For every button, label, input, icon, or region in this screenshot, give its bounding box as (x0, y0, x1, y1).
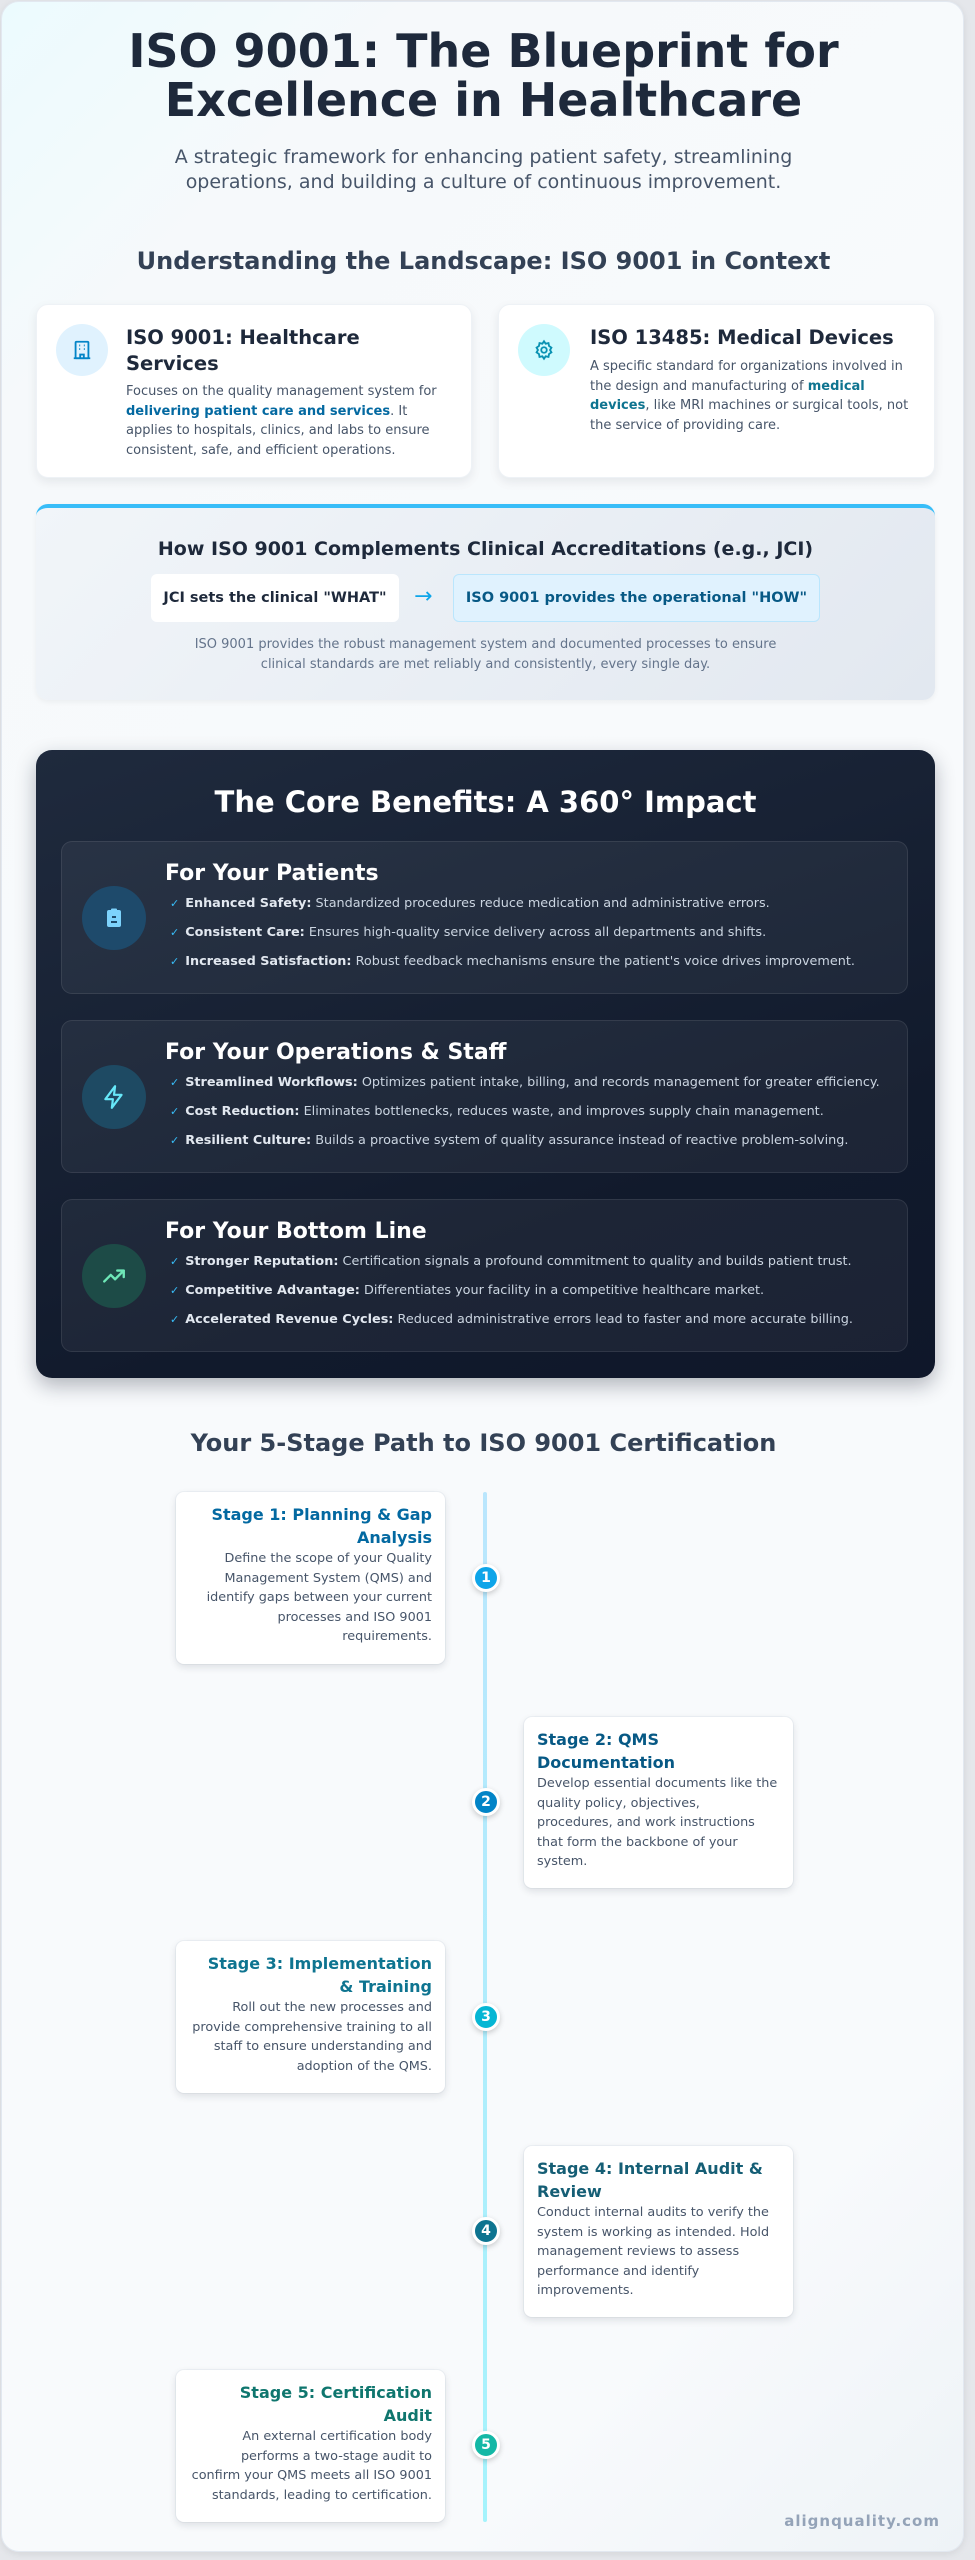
stage 5 card (176, 2370, 445, 2522)
heading: For Your Bottom Line (165, 1219, 427, 1244)
stage 3 card: staff to ensure understanding and (214, 2039, 432, 2054)
card title: ISO 13485: Medical Devices (590, 326, 894, 349)
stage 5 card: standards, leading to certification. (212, 2488, 432, 2502)
stage 3 card: & Training (339, 1977, 432, 1996)
stage 2 card: system. (537, 1854, 587, 1869)
icon: gear (518, 324, 570, 376)
benefit card: bottom line (61, 1199, 908, 1352)
stage 2 card (524, 1717, 793, 1888)
stage 2 dot (472, 1788, 500, 1816)
stage 3 card: Roll out the new processes and (232, 2000, 432, 2015)
stage 5 card: An external certification body (242, 2429, 432, 2444)
box: JCI what (151, 574, 399, 622)
panel: core benefits (36, 750, 935, 1378)
stage 5 card: Audit (384, 2406, 432, 2425)
benefits heading: The Core Benefits: A 360° Impact (215, 785, 756, 819)
stage 4 dot: 4 (481, 2223, 491, 2239)
stage 2 card: Develop essential documents like the (537, 1776, 777, 1791)
benefit card: bottom line: ✓ Accelerated Revenue Cycles: Reduced administrative errors lead to faster and more accurate billing. (170, 1312, 853, 1327)
card body: A specific standard for organizations involved in the design and manufacturing of medical devices, like MRI machines or surgical tools, not the service of providing care. (590, 359, 908, 432)
benefit card: patients (61, 841, 908, 994)
stage 3 dot: 3 (481, 2009, 491, 2025)
stage 5 card: Stage 5: Certification (240, 2383, 432, 2402)
panel note (195, 637, 776, 672)
stage 2 card: that form the backbone of your (537, 1834, 738, 1850)
stage 4 card: system is working as intended. Hold (537, 2224, 769, 2240)
stage 1 card: Define the scope of your Quality (225, 1551, 432, 1566)
stage 3 dot (472, 2003, 500, 2031)
benefit card: patients: ✓ Increased Satisfaction: Robust feedback mechanisms ensure the patient's voice drives improvement. (170, 954, 855, 969)
benefit card: bottom line: ✓ Competitive Advantage: Differentiates your facility in a competitive healthcare market. (170, 1283, 764, 1298)
stage 2 card: procedures, and work instructions (537, 1815, 755, 1830)
arrow: → (414, 584, 432, 609)
icon: clipboard (82, 886, 146, 950)
stage 1 card: Analysis (357, 1528, 432, 1547)
panel: ISO 9001 healthcare services (36, 304, 472, 478)
stage 1 card: identify gaps between your current (207, 1590, 432, 1605)
stage 3 card (176, 1941, 445, 2093)
stage 1 dot: 1 (481, 1570, 491, 1586)
section heading: landscape: Understanding the Landscape: ISO 9001 in Context (137, 247, 830, 275)
stage 2 card: quality policy, objectives, (537, 1796, 700, 1810)
heading: For Your Operations & Staff (165, 1040, 506, 1065)
title (128, 24, 839, 127)
bullets: ✓ Streamlined Workflows: Optimizes patient intake, billing, and records management for greater efficiency. (170, 1075, 880, 1090)
icon: zap (82, 1065, 146, 1129)
stage 5 card: performs a two-stage audit to (241, 2448, 432, 2464)
benefit card: operations (61, 1020, 908, 1173)
panel heading: How ISO 9001 Complements Clinical Accreditations (e.g., JCI) (158, 538, 813, 560)
subtitle: A strategic framework for enhancing patient safety, streamlining (175, 146, 792, 168)
stage 4 card: Review (537, 2182, 602, 2201)
benefit card: operations: ✓ Cost Reduction: Eliminates bottlenecks, reduces waste, and improves supply chain management. (170, 1104, 824, 1119)
stage 2 card: Stage 2: QMS (537, 1730, 659, 1749)
bullets: ✓ Enhanced Safety: Standardized procedures reduce medication and administrative errors. (170, 896, 770, 911)
stage 1 card: processes and ISO 9001 (277, 1610, 432, 1624)
panel note: ISO 9001 provides the robust management system and documented processes to ensure (195, 637, 776, 652)
icon: trending up (82, 1244, 146, 1308)
box: ISO how (453, 574, 820, 622)
stage 4 card: management reviews to assess (537, 2244, 739, 2259)
footer brand: alignquality.com (784, 2512, 940, 2530)
stage 4 card (524, 2146, 793, 2317)
title: ISO 9001: The Blueprint for (128, 24, 839, 78)
stage 3 card: provide comprehensive training to all (192, 2020, 432, 2034)
benefit card: patients: ✓ Consistent Care: Ensures high-quality service delivery across all departments and shifts. (170, 925, 766, 940)
panel: JCI complement (36, 504, 935, 700)
title: Excellence in Healthcare (165, 73, 802, 127)
stage 1 card (176, 1492, 445, 1664)
benefit card: operations: ✓ Resilient Culture: Builds a proactive system of quality assurance instead of reactive problem-solving. (170, 1133, 848, 1148)
section heading: 5-stage path: Your 5-Stage Path to ISO 9001 Certification (191, 1429, 776, 1457)
stage 4 card: performance and identify (537, 2264, 699, 2278)
card title: ISO 9001: Healthcare Services (126, 326, 360, 375)
stage 2 card: Documentation (537, 1753, 675, 1772)
stage 2 dot: 2 (481, 1794, 491, 1810)
stage 5 dot (472, 2431, 500, 2459)
timeline line (483, 1492, 487, 2522)
stage 4 card: Stage 4: Internal Audit & (537, 2159, 763, 2178)
stage 1 card: requirements. (342, 1629, 432, 1644)
card body: Focuses on the quality management system for delivering patient care and services. It applies to hospitals, clinics, and labs to ensure consistent, safe, and efficient operations. (126, 384, 437, 458)
icon: building (56, 324, 108, 376)
subtitle (174, 146, 792, 193)
stage 5 dot: 5 (481, 2437, 491, 2453)
stage 4 dot (472, 2217, 500, 2245)
stage 3 card: adoption of the QMS. (297, 2058, 432, 2074)
stage 4 card: improvements. (537, 2283, 634, 2298)
stage 4 card: Conduct internal audits to verify the (537, 2205, 769, 2220)
box: ISO how: ISO 9001 provides the operational "HOW" (466, 590, 807, 606)
panel note: clinical standards are met reliably and consistently, every single day. (261, 656, 710, 672)
stage 5 card: confirm your QMS meets all ISO 9001 (192, 2468, 432, 2483)
heading: For Your Patients (165, 861, 379, 886)
stage 1 dot (472, 1564, 500, 1592)
stage 1 card: Management System (QMS) and (224, 1570, 432, 1586)
box: JCI what: JCI sets the clinical "WHAT" (163, 590, 387, 606)
stage 3 card: Stage 3: Implementation (208, 1954, 432, 1973)
subtitle: operations, and building a culture of continuous improvement. (186, 171, 781, 193)
bullets: ✓ Stronger Reputation: Certification signals a profound commitment to quality and builds patient trust. (170, 1254, 852, 1269)
panel: ISO 13485 medical devices (498, 304, 935, 478)
stage 1 card: Stage 1: Planning & Gap (211, 1505, 432, 1524)
